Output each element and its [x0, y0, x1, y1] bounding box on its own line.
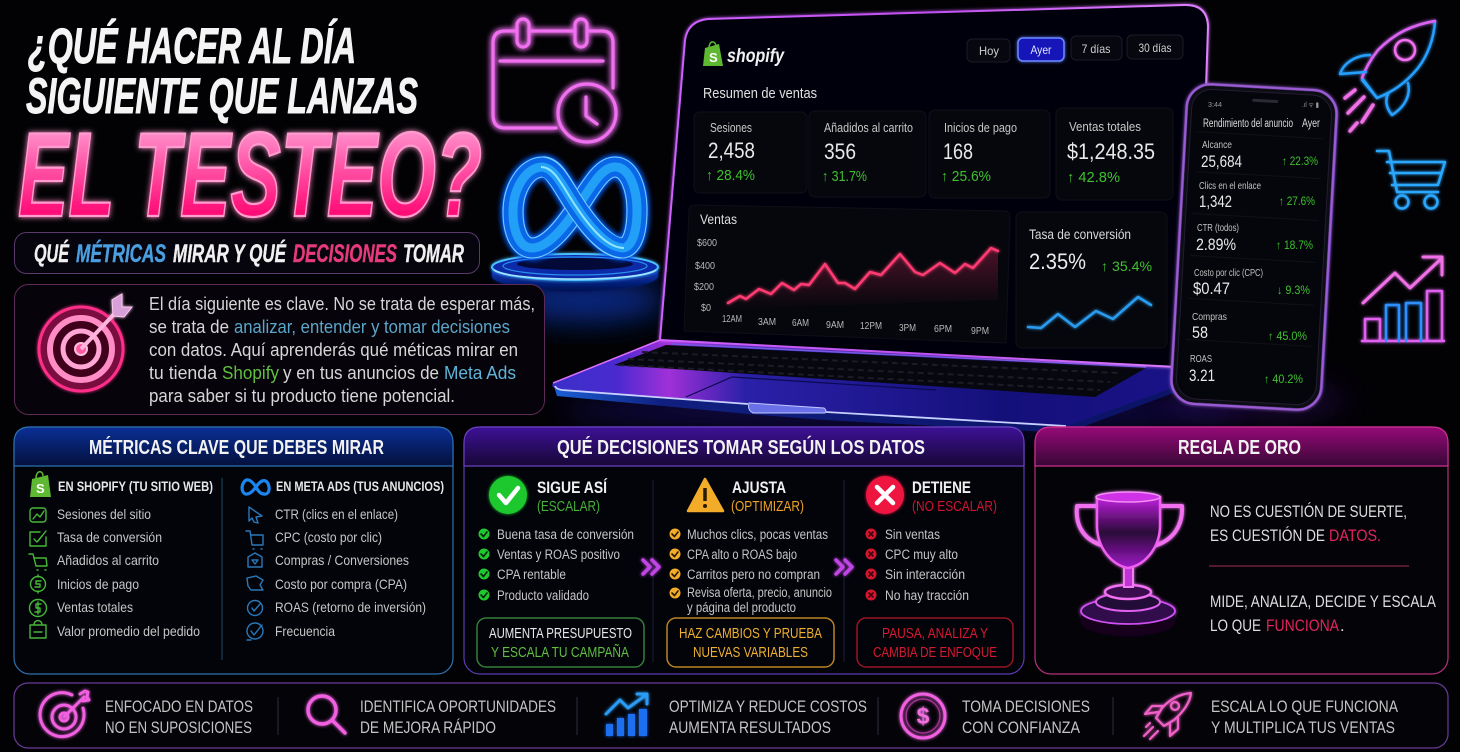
icon: cart [1377, 151, 1445, 208]
phone [1170, 83, 1340, 411]
laptop base [552, 340, 1195, 433]
conversion panel: Tasa de conversión [1029, 227, 1131, 242]
column: adjust [667, 478, 834, 667]
date filter buttons: Hoy [979, 44, 999, 58]
column: stop: CPC muy alto [885, 547, 958, 562]
column: adjust: HAZ CAMBIOS Y PRUEBA [679, 626, 822, 642]
phone readouts: $0.47 [1193, 280, 1230, 298]
sales summary: ↑ 28.4% [706, 168, 755, 184]
sales summary: ↑ 25.6% [941, 169, 991, 185]
column: adjust: Muchos clics, pocas ventas [687, 527, 828, 542]
benefit: focus on data: NO EN SUPOSICIONES [105, 719, 252, 737]
subtitle pill: QUÉ [34, 239, 70, 268]
phone readouts: ↑ 22.3% [1282, 156, 1318, 168]
date filter buttons [967, 35, 1183, 62]
phone readouts: Costo por clic (CPC) [1194, 267, 1263, 279]
golden rule text [1209, 502, 1436, 635]
column: keep going: CPA rentable [497, 567, 566, 582]
sales summary: Ventas totales [1069, 120, 1141, 134]
benefit: spot opportunities: DE MEJORA RÁPIDO [360, 718, 496, 737]
icon: target [39, 294, 132, 391]
intro text: para saber si tu producto tiene potencial. [149, 386, 455, 406]
column: adjust: Revisa oferta, precio, anuncio [687, 585, 832, 600]
golden rule text: LO QUE [1210, 617, 1261, 635]
conversion panel: 2.35% [1029, 249, 1086, 274]
icon: calendar with clock [493, 19, 616, 142]
sales line chart: $600 [697, 238, 717, 249]
panel: benefits strip [14, 683, 1448, 748]
column: keep going: SIGUE ASÍ [537, 478, 608, 497]
meta ads column [242, 478, 444, 640]
meta ads column: EN META ADS (TUS ANUNCIOS) [276, 478, 444, 494]
phone readouts: ↑ 18.7% [1276, 240, 1313, 252]
benefit: spot opportunities [308, 696, 556, 737]
phone readouts: ↑ 40.2% [1264, 374, 1303, 386]
shopify column: Tasa de conversión [57, 529, 162, 545]
sales summary: $1,248.35 [1067, 139, 1155, 164]
panel: golden rule [1035, 427, 1448, 674]
panel: decisions [464, 427, 1024, 674]
benefit: scale what works [1144, 693, 1398, 739]
sales line chart: 9AM [826, 320, 844, 331]
intro text [149, 294, 535, 406]
golden rule text: . [1340, 617, 1345, 635]
laptop [552, 5, 1208, 433]
phone readouts: Alcance [1202, 139, 1232, 151]
subtitle pill [14, 232, 480, 274]
panel: key metrics [14, 427, 453, 674]
benefit: focus on data: ENFOCADO EN DATOS [105, 698, 253, 716]
sales line chart: 3AM [758, 317, 776, 328]
subtitle pill: MIRAR Y QUÉ [173, 239, 287, 268]
shopify column: Sesiones del sitio [57, 506, 151, 522]
meta ads column: Costo por compra (CPA) [275, 576, 407, 592]
intro text: tu tienda [149, 363, 218, 383]
intro text: se trata de [149, 317, 229, 337]
sales line chart: $0 [701, 303, 711, 314]
phone readouts: 58 [1192, 324, 1208, 342]
meta ads column: CPC (costo por clic) [275, 529, 382, 545]
shopify column: EN SHOPIFY (TU SITIO WEB) [58, 478, 213, 494]
sales line chart: 6PM [934, 324, 952, 335]
shopify logo [703, 42, 785, 67]
sales summary: 168 [943, 139, 973, 164]
metrics header [14, 427, 453, 466]
phone readouts: ↓ 9.3% [1277, 285, 1310, 297]
column: adjust: (OPTIMIZAR) [731, 498, 804, 515]
phone readouts: 1,342 [1199, 193, 1232, 211]
benefit: spot opportunities: IDENTIFICA OPORTUNIDADES [360, 698, 556, 716]
sales summary [694, 85, 1173, 200]
benefit: optimize costs: AUMENTA RESULTADOS [669, 719, 831, 737]
sales line chart: 9PM [971, 326, 989, 337]
logo tube [513, 167, 637, 248]
title: EL TESTEO? [18, 108, 482, 242]
benefit: scale what works: Y MULTIPLICA TUS VENTAS [1211, 719, 1395, 737]
sales line chart: 3PM [899, 323, 916, 334]
date filter buttons: Ayer [1030, 43, 1052, 57]
icon: trophy [1077, 492, 1182, 636]
phone readouts: 25,684 [1201, 153, 1242, 171]
title: SIGUIENTE QUE LANZAS [26, 68, 418, 124]
subtitle pill: TOMAR [403, 240, 464, 268]
metrics header: MÉTRICAS CLAVE QUE DEBES MIRAR [89, 436, 384, 459]
intro text: con datos. Aquí aprenderás qué méticas mirar en [149, 340, 518, 360]
benefit: confident decisions [901, 694, 1090, 738]
shopify logo: S [709, 50, 718, 65]
column: adjust: AJUSTA [732, 478, 786, 497]
laptop screen [660, 5, 1208, 368]
title: ¿QUÉ HACER AL DÍA [28, 18, 356, 74]
shopify column: Añadidos al carrito [57, 552, 159, 568]
column: keep going: AUMENTA PRESUPUESTO [489, 626, 632, 642]
intro text: El día siguiente es clave. No se trata de esperar más, [149, 294, 535, 314]
benefit: confident decisions: $ [917, 703, 930, 729]
benefit: confident decisions: CON CONFIANZA [962, 719, 1080, 737]
golden rule header [1035, 427, 1448, 466]
phone readouts: 2.89% [1196, 236, 1236, 254]
sales summary: Sesiones [710, 121, 752, 135]
phone readouts: .ıl ᯤ ▮ [1302, 102, 1319, 109]
sales summary: Añadidos al carrito [824, 121, 913, 135]
sales line chart: $400 [695, 261, 715, 272]
phone readouts: Compras [1192, 311, 1227, 323]
column: keep going: Buena tasa de conversión [497, 527, 634, 542]
column: keep going: Ventas y ROAS positivo [497, 547, 620, 562]
date filter buttons: 7 días [1082, 42, 1110, 56]
golden rule text: NO ES CUESTIÓN DE SUERTE, [1210, 502, 1407, 521]
meta ads column: ROAS (retorno de inversión) [275, 599, 426, 615]
phone readouts: 3.21 [1189, 367, 1215, 385]
shopify column: Valor promedio del pedido [57, 623, 200, 639]
arrow: chevrons one [643, 560, 659, 574]
meta ads column: Compras / Conversiones [275, 552, 409, 568]
phone readouts: ↑ 27.6% [1279, 196, 1315, 208]
benefit: optimize costs: OPTIMIZA Y REDUCE COSTOS [669, 698, 867, 716]
shopify column [29, 472, 213, 639]
column: adjust: Carritos pero no compran [687, 567, 820, 582]
sales line chart: 6AM [792, 318, 809, 329]
column: adjust: NUEVAS VARIABLES [693, 645, 808, 661]
panel: intro [14, 284, 544, 414]
sales summary: 356 [824, 139, 856, 164]
intro text: analizar, entender y tomar decisiones [234, 317, 510, 337]
sales line chart: Ventas [700, 211, 737, 227]
subtitle pill: DECISIONES [293, 240, 397, 268]
column: stop: CAMBIA DE ENFOQUE [873, 645, 997, 661]
shopify logo: shopify [727, 46, 785, 67]
sales line chart: $200 [694, 282, 714, 293]
column: stop: PAUSA, ANALIZA Y [882, 626, 988, 642]
column: stop: DETIENE [912, 478, 971, 497]
benefit: focus on data [40, 691, 253, 737]
sales line chart [684, 205, 1010, 343]
sales line chart: 12AM [722, 314, 742, 325]
column: keep going: Producto validado [497, 588, 589, 603]
meta ads column: CTR (clics en el enlace) [275, 506, 398, 522]
sales line chart: 12PM [860, 321, 882, 332]
golden rule text: ES CUESTIÓN DE [1210, 526, 1325, 545]
phone readouts: CTR (todos) [1197, 222, 1239, 234]
icon: rocket [1340, 21, 1435, 131]
column: stop [857, 476, 1013, 667]
shopify column: S [36, 481, 45, 496]
icon: meta logo [492, 167, 658, 291]
sales summary: ↑ 31.7% [822, 169, 867, 185]
column: keep going: Y ESCALA TU CAMPAÑA [491, 644, 629, 661]
golden rule text: FUNCIONA [1266, 617, 1339, 635]
icon: growth chart [1362, 257, 1444, 341]
decisions header: QUÉ DECISIONES TOMAR SEGÚN LOS DATOS [557, 435, 925, 459]
intro text: Shopify [222, 363, 279, 383]
phone readouts: ↑ 45.0% [1268, 331, 1307, 343]
column: stop: Sin interacción [885, 567, 965, 582]
phone readouts: Clics en el enlace [1199, 180, 1261, 192]
phone readouts: Ayer [1302, 118, 1320, 130]
column: stop: Sin ventas [885, 527, 940, 542]
column: stop: No hay tracción [885, 588, 969, 603]
phone readouts [1189, 102, 1320, 386]
phone readouts: 3:44 [1208, 102, 1222, 109]
shopify column: Inicios de pago [57, 576, 139, 592]
benefit: optimize costs [606, 694, 867, 737]
intro text: Meta Ads [444, 363, 516, 383]
phone readouts: ROAS [1190, 353, 1212, 365]
phone readouts: Rendimiento del anuncio [1203, 118, 1293, 130]
shopify column: Ventas totales [57, 599, 133, 615]
conversion panel [1016, 212, 1167, 348]
logo pedestal [492, 254, 658, 291]
arrow: chevrons two [836, 560, 852, 574]
column: adjust: y página del producto [687, 600, 796, 615]
column: stop: (NO ESCALAR) [912, 498, 997, 515]
meta ads column: Frecuencia [275, 623, 335, 639]
benefit: confident decisions: TOMA DECISIONES [962, 698, 1090, 716]
conversion panel: ↑ 35.4% [1101, 258, 1152, 274]
column: adjust: CPA alto o ROAS bajo [687, 547, 797, 562]
column: keep going: (ESCALAR) [537, 498, 600, 515]
sales summary: 2,458 [708, 138, 755, 163]
sales summary: ↑ 42.8% [1067, 170, 1120, 186]
golden rule header: REGLA DE ORO [1178, 437, 1301, 459]
subtitle pill: MÉTRICAS [76, 239, 166, 268]
sales summary: Inicios de pago [944, 121, 1017, 135]
intro text: y en tus anuncios de [283, 363, 439, 383]
benefit: scale what works: ESCALA LO QUE FUNCIONA [1211, 698, 1398, 716]
sales summary: Resumen de ventas [703, 85, 817, 102]
column: keep going [477, 476, 644, 667]
golden rule text: DATOS. [1329, 527, 1381, 545]
title [18, 18, 482, 242]
date filter buttons: 30 días [1138, 41, 1172, 55]
decisions header [464, 427, 1024, 466]
